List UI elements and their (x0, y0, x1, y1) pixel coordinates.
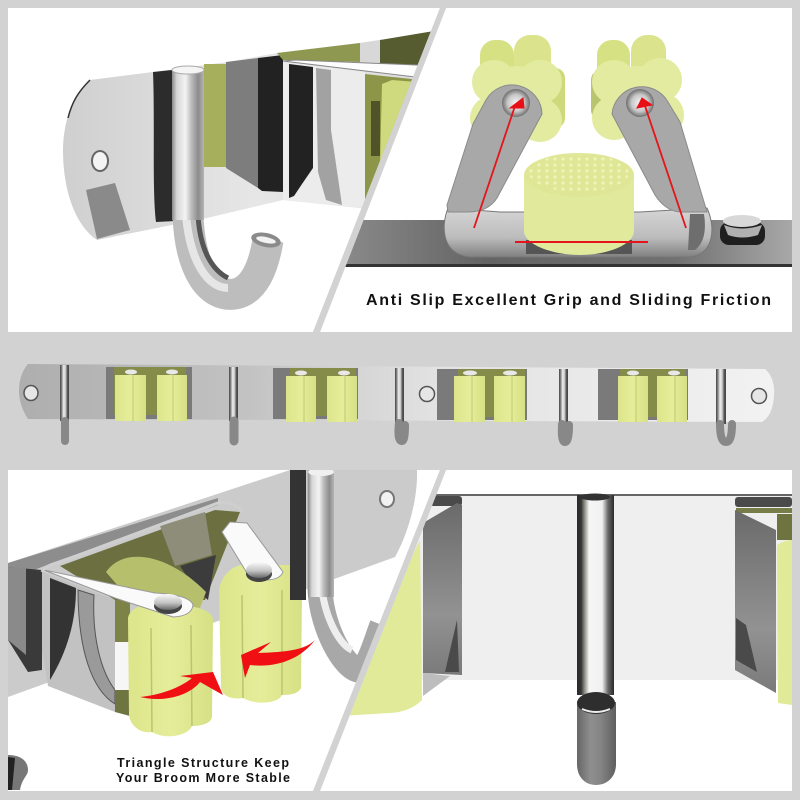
left pin (502, 89, 530, 117)
bolt (720, 215, 765, 245)
plate (320, 495, 792, 680)
green reflection (204, 64, 228, 167)
clip 3 (437, 369, 527, 422)
left clip reflection (445, 620, 459, 672)
left lever (447, 85, 542, 212)
base plate lower edge (320, 264, 792, 267)
red arrow: left to right (140, 672, 223, 699)
hook 1 (60, 365, 69, 441)
shadow under center grip (526, 240, 632, 254)
center grip (524, 153, 634, 255)
caption: triangle structure: Your Broom More Stable (116, 771, 290, 785)
olive gap below (115, 690, 130, 716)
left clip wall (423, 503, 462, 675)
left pin (154, 594, 182, 614)
upper right dark green interior (380, 32, 431, 65)
left lever (44, 570, 193, 617)
bottom left knob (8, 755, 28, 790)
caption: triangle structure (116, 756, 290, 785)
clip dark block (258, 55, 283, 192)
hook 4 (559, 369, 569, 442)
upper band olive (277, 43, 360, 62)
grip dots (371, 101, 380, 156)
left clip rim (430, 496, 462, 506)
left roller (470, 35, 565, 142)
right clip wall (735, 510, 776, 693)
green grip reflection (380, 80, 411, 160)
band shadow patches (688, 214, 705, 250)
right lever (222, 522, 283, 580)
hook 3 (395, 368, 405, 441)
panel: top left hook close-up (8, 8, 448, 332)
white gap (115, 642, 130, 692)
clip front wall (283, 62, 365, 208)
clip chrome reflection (316, 68, 342, 205)
left clip lower silver (423, 673, 450, 696)
panel: bottom right hook front view (320, 470, 792, 791)
panel: full rack (19, 364, 774, 442)
frame hook reflection (78, 590, 115, 704)
panel: bottom left triangle structure (8, 468, 448, 791)
clip opening back (60, 510, 240, 600)
clip band (444, 208, 712, 257)
upper band column (360, 40, 376, 62)
clip 2 (273, 368, 358, 422)
frame top edge (42, 502, 243, 572)
right interior (777, 514, 792, 540)
clip back dark (180, 555, 216, 600)
dark reflection strip (153, 70, 173, 222)
plate top edge (320, 494, 792, 496)
right pin (626, 89, 654, 117)
red arrow: right to left (241, 640, 315, 678)
base plate (320, 220, 792, 266)
right lever (612, 87, 707, 212)
plate left edge shadow (68, 80, 90, 118)
left wall reflection (8, 567, 26, 655)
right roller (591, 35, 684, 140)
left roller (128, 603, 213, 736)
mounting hole (92, 151, 108, 171)
clip 1 (106, 367, 192, 421)
left wall (8, 567, 42, 672)
right clip inner rim (736, 508, 792, 513)
caption: triangle structure: Triangle Structure Keep (117, 756, 289, 770)
mounting hole (380, 491, 394, 507)
hook (172, 66, 282, 294)
right clip green (777, 540, 792, 705)
grip cylinder (106, 557, 206, 608)
mounting plate (63, 30, 440, 240)
hook 2 (229, 367, 238, 441)
green interior (365, 74, 412, 199)
right pin (246, 562, 272, 582)
clip top white edge (282, 60, 418, 78)
plate top strip (8, 498, 218, 580)
left clip green (340, 540, 422, 716)
panel: top right grip close-up (320, 8, 792, 332)
hook reflection (86, 183, 130, 239)
clip dark reflection (289, 64, 313, 198)
rail (19, 364, 774, 422)
plate (8, 470, 417, 697)
hook 5 (716, 369, 732, 442)
olive gap above (115, 600, 130, 642)
clip grey block (226, 58, 258, 188)
hook (577, 494, 616, 785)
clip back silver (160, 512, 212, 566)
right clip reflection (736, 618, 757, 672)
diagonal divider stripes (313, 8, 446, 791)
frame dark reflection (50, 578, 76, 680)
right clip rim (735, 497, 792, 507)
clip 4 (598, 369, 688, 422)
frame wall (42, 572, 115, 712)
red arrows (474, 98, 686, 242)
caption: grip: Anti Slip Excellent Grip and Sliding Friction (366, 292, 771, 309)
hook (290, 468, 382, 670)
right roller (219, 564, 302, 703)
rail holes (24, 386, 766, 404)
